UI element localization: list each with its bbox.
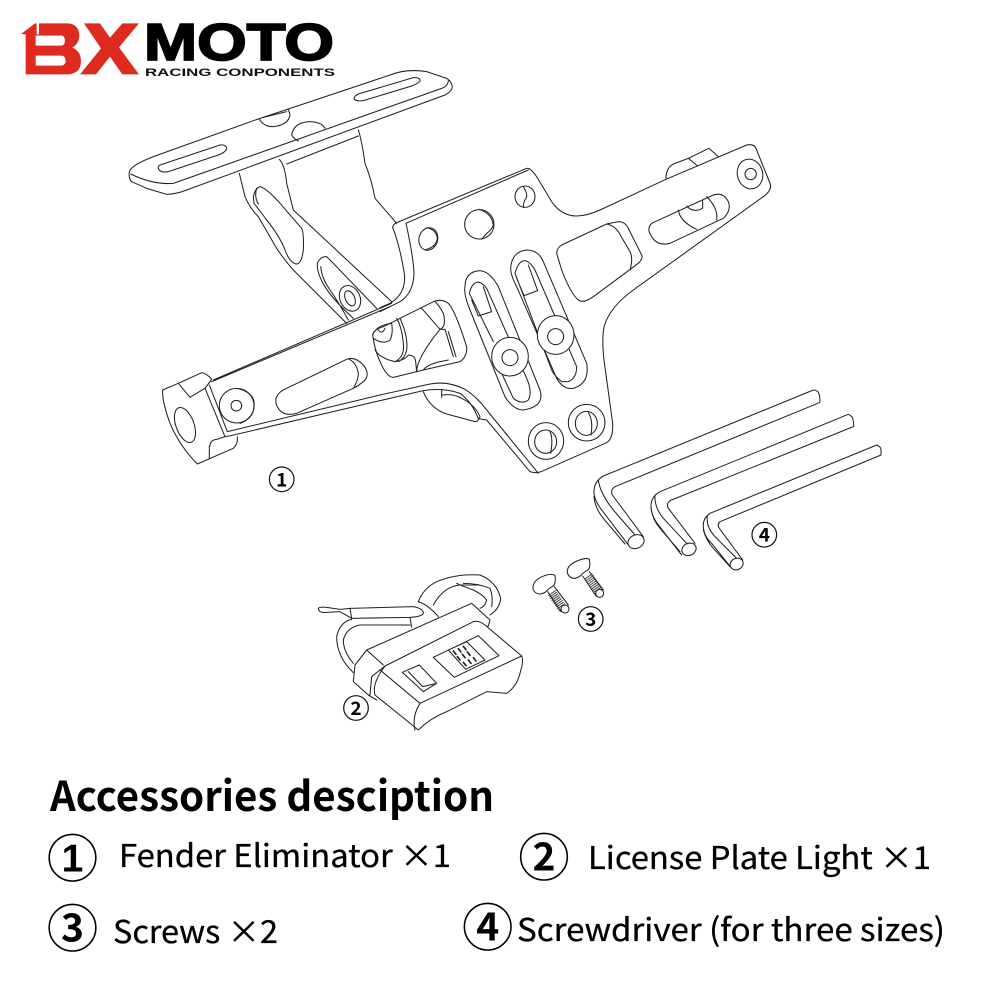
callout: number 4: 4: [759, 521, 770, 548]
callout: number 1: 1: [276, 465, 287, 492]
lower double edge: [380, 383, 538, 473]
adjust slot left: [465, 271, 541, 410]
left arm of plate: [163, 303, 392, 464]
badge 4: [464, 896, 511, 952]
lead wires: [318, 607, 423, 618]
badge 4: 4: [476, 896, 499, 952]
right arm slot: [649, 194, 729, 244]
illustration: screws: [533, 559, 604, 613]
under-plate lump: [423, 389, 480, 422]
illustration: hex keys: [594, 390, 881, 572]
small window: [402, 665, 437, 692]
badge 2: 2: [532, 826, 556, 882]
plate outline: [393, 145, 771, 473]
label 3: Screws ×2: [113, 907, 278, 953]
badge 2: [521, 826, 567, 882]
large window: [557, 222, 642, 301]
right arm: [358, 130, 397, 223]
logo mark: red 1BX: [21, 23, 139, 74]
arm cut-out lower: [317, 257, 377, 320]
legend item 2: [521, 826, 931, 882]
logo: BXMOTO Racing Components: [21, 14, 335, 79]
label 2: License Plate Light ×1: [588, 833, 931, 879]
screw two: [567, 559, 604, 597]
upper wire loop: [418, 575, 501, 615]
arm cut-out upper: [253, 187, 303, 264]
strap and top surface: [353, 603, 490, 695]
legend item 4: [464, 896, 945, 952]
adjust slot left nut: [492, 337, 528, 376]
upright arms and plate strap: [129, 71, 452, 323]
small hex key: [703, 445, 881, 572]
lens hatching: [453, 646, 476, 666]
callout: number 2: [344, 694, 368, 721]
callout: number 1: [269, 465, 294, 492]
heading: Accessories desciption: [49, 763, 494, 823]
arm slot: [276, 358, 367, 414]
top holes: [416, 226, 440, 252]
center cut-out with bolt: [373, 300, 467, 377]
strap holes: [259, 109, 290, 127]
legend item 3: [49, 898, 278, 954]
plate strap body: [129, 71, 452, 194]
main plate: [380, 145, 771, 473]
medium hex key: [651, 414, 854, 558]
badge 3: [49, 898, 96, 954]
arm edges: [212, 303, 392, 382]
light body: [374, 621, 523, 730]
label 4: Screwdriver (for three sizes): [517, 905, 945, 951]
arm bolt: [335, 282, 365, 315]
right end bolt: [734, 156, 766, 192]
end cap: [163, 373, 212, 397]
label 1: Fender Eliminator ×1: [119, 831, 451, 877]
large hex key: [594, 390, 820, 551]
screw one: [533, 574, 569, 613]
badge 1: 1: [62, 838, 83, 880]
logo tagline: RACING CONPONENTS: [145, 67, 335, 79]
arm bolt: [219, 388, 254, 423]
callout: number 3: [578, 605, 603, 632]
lens panel: [433, 636, 499, 677]
legend item 1: [49, 831, 451, 881]
callout: number 2: 2: [350, 694, 362, 721]
adjust slot right: [511, 250, 587, 389]
left arm: [239, 173, 347, 323]
top bump: [666, 148, 718, 178]
illustration: fender eliminator: [129, 71, 771, 473]
strap slots: [158, 145, 227, 172]
callout: number 4: [752, 521, 777, 548]
badge 3: 3: [61, 898, 84, 954]
bottom bolts: [528, 423, 564, 459]
illustration: license plate light: [318, 575, 523, 730]
callout: number 3: 3: [585, 605, 596, 632]
logo wordmark: MOTO: MOTO: [144, 14, 334, 72]
adjust slot right nut: [537, 316, 574, 354]
badge 1: [49, 834, 96, 881]
left wire loop: [337, 619, 410, 673]
